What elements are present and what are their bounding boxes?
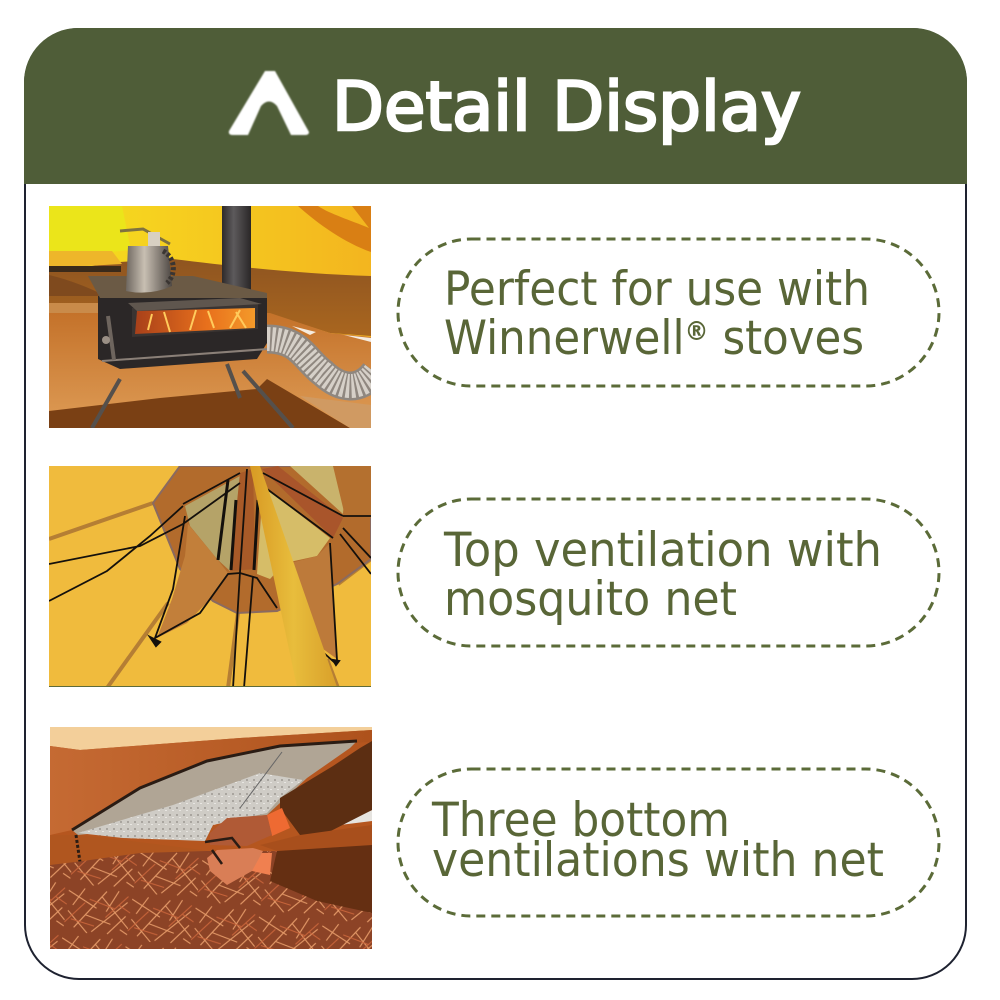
fire window: [132, 304, 258, 337]
callout 1: Winnerwell: [444, 311, 704, 366]
callout 1: [398, 239, 939, 386]
hands: [210, 815, 272, 846]
sleeves: [280, 741, 372, 838]
header banner: [24, 28, 967, 184]
callout 2: Top ventilation with: [443, 523, 882, 578]
callout 1: stoves: [709, 311, 864, 366]
photo: bottom ventilation: [50, 727, 372, 949]
stove pipe: [222, 206, 251, 290]
centre pole: [250, 466, 337, 687]
callout 2: [398, 499, 939, 646]
callout 2: mosquito net: [444, 572, 737, 627]
callout 3: ventilations with net: [432, 833, 884, 888]
callout 1: Perfect for use with: [444, 262, 870, 317]
stove body: [98, 296, 267, 369]
callout 3: [398, 769, 939, 916]
callout 1: ®: [685, 317, 709, 347]
canopy seams: [49, 503, 371, 688]
kettle: [126, 246, 172, 293]
icon: tent logo: [229, 71, 309, 135]
flap edge: [50, 835, 210, 865]
straw ground: [50, 851, 372, 949]
black guy lines: [49, 469, 371, 688]
photo: top ventilation: [49, 466, 371, 688]
flexible duct: [267, 339, 375, 386]
title: Detail Display: [332, 68, 801, 147]
photo: wood stove in tent: [49, 206, 375, 428]
mesh and view: [72, 741, 357, 835]
callout 3: Three bottom: [431, 793, 730, 848]
canopy ring: [153, 466, 371, 613]
stove legs: [92, 364, 293, 428]
